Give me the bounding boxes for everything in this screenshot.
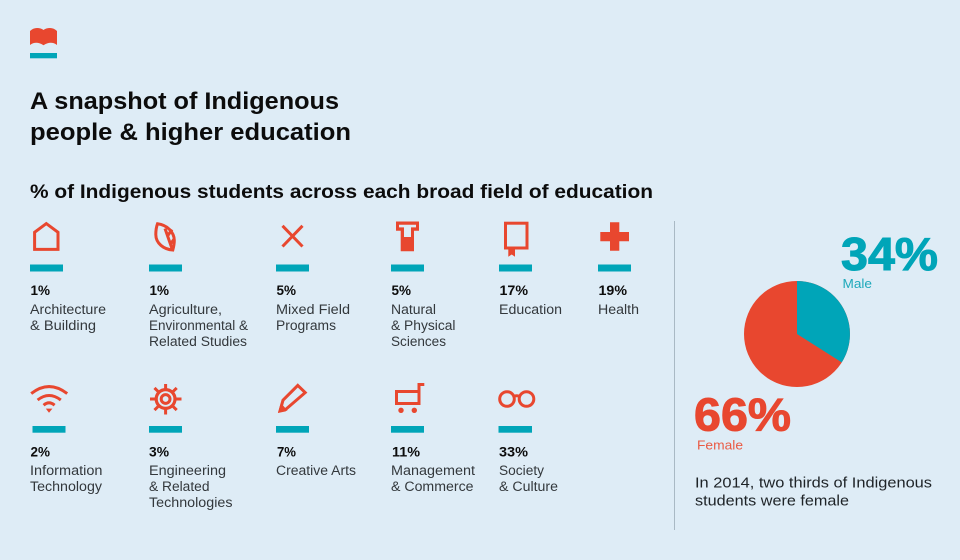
- male statistic: 34%: [841, 228, 938, 280]
- item: society and culture: [498, 392, 558, 494]
- female statistic: 66%: [694, 389, 791, 441]
- item: engineering: Technologies: [149, 495, 233, 510]
- female statistic: Female: [697, 438, 743, 452]
- item: architecture and building: Architecture: [30, 302, 106, 317]
- title: A snapshot of Indigenous: [30, 88, 339, 115]
- item: mixed field programs: Mixed Field: [276, 302, 350, 317]
- panel: gender split: [694, 228, 938, 510]
- item: education: 17%: [500, 283, 528, 298]
- icon: house: [35, 224, 58, 249]
- icon: gear: [150, 384, 182, 414]
- item: society and culture: 33%: [499, 444, 528, 460]
- item: engineering: & Related: [149, 479, 210, 494]
- item: creative arts: [276, 385, 356, 478]
- item: mixed field programs: Programs: [276, 318, 336, 333]
- item: agriculture: Environmental &: [149, 318, 248, 333]
- icon: glasses: [500, 392, 534, 406]
- panel: fields of education: [30, 222, 639, 510]
- item: engineering: Engineering: [149, 463, 226, 478]
- icon: bookmarked book: [506, 223, 527, 257]
- item: agriculture: [149, 224, 248, 349]
- item: natural and physical sciences: [391, 222, 456, 349]
- item: education: Education: [499, 302, 562, 317]
- item: natural and physical sciences: Natural: [391, 302, 436, 317]
- icon: shopping cart: [396, 384, 424, 413]
- icon: pencil: [278, 385, 305, 413]
- section heading: % of Indigenous students across each broad field of education: [30, 182, 653, 203]
- caption: In 2014, two thirds of Indigenous: [695, 475, 932, 492]
- item: natural and physical sciences: 5%: [392, 283, 411, 298]
- item: agriculture: 1%: [150, 283, 169, 298]
- item: management and commerce: [391, 384, 475, 494]
- item: health: 19%: [598, 283, 627, 298]
- item: architecture and building: & Building: [30, 318, 96, 333]
- item: agriculture: Agriculture,: [149, 302, 222, 317]
- icon: leaf: [156, 224, 174, 250]
- item: engineering: 3%: [149, 444, 169, 460]
- item: agriculture: Related Studies: [149, 334, 247, 349]
- item: information technology: Information: [30, 463, 102, 478]
- title: [30, 88, 351, 146]
- logo: book icon: [30, 28, 57, 58]
- item: natural and physical sciences: & Physical: [391, 318, 456, 333]
- item: creative arts: 7%: [277, 444, 296, 460]
- item: mixed field programs: 5%: [276, 283, 296, 298]
- item: health: Health: [598, 302, 639, 317]
- item: engineering: [149, 384, 233, 510]
- item: education: [499, 223, 562, 317]
- title: people & higher education: [30, 119, 351, 146]
- item: architecture and building: [30, 224, 106, 333]
- item: management and commerce: Management: [391, 463, 475, 478]
- item: information technology: Technology: [30, 479, 102, 494]
- icon: test tube: [396, 222, 419, 251]
- item: information technology: 2%: [30, 444, 50, 460]
- item: health: [598, 222, 639, 317]
- icon: cross mark: [282, 226, 302, 246]
- icon: medical cross: [600, 222, 629, 251]
- item: mixed field programs: [276, 226, 350, 333]
- item: creative arts: Creative Arts: [276, 463, 356, 478]
- caption: students were female: [695, 493, 849, 510]
- item: management and commerce: 11%: [392, 444, 420, 460]
- pie chart: [744, 281, 850, 387]
- item: architecture and building: 1%: [30, 283, 50, 298]
- icon: wifi: [31, 387, 67, 413]
- male statistic: Male: [842, 276, 872, 291]
- caption: [695, 475, 932, 510]
- item: information technology: [30, 387, 102, 494]
- item: society and culture: & Culture: [499, 479, 558, 494]
- item: natural and physical sciences: Sciences: [391, 334, 446, 349]
- item: society and culture: Society: [499, 463, 544, 478]
- item: management and commerce: & Commerce: [391, 479, 474, 494]
